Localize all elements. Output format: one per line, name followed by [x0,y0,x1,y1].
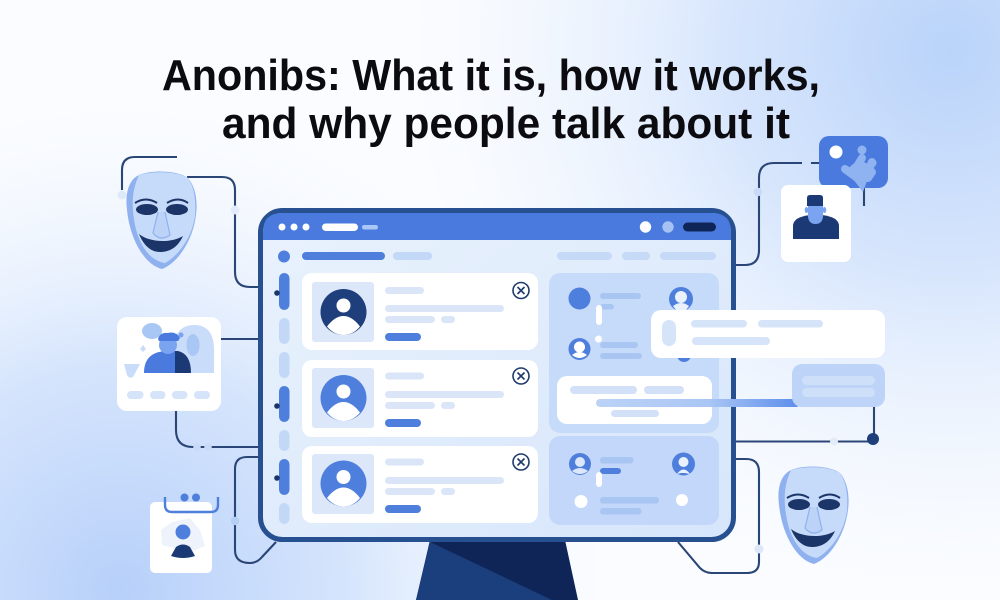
bottom-left calendar card [150,494,218,573]
profile card 1 [302,273,538,350]
monitor [260,210,734,540]
gradient progress bar [596,399,800,407]
right panel top [549,273,719,433]
bottom-right mask [778,467,849,564]
toolbar [278,250,716,262]
top-right blue image card [819,136,888,192]
browser header bar [263,213,731,240]
sidebar [274,273,290,524]
left image card [117,317,221,411]
floating notification card [651,310,885,358]
connector end node [867,433,879,445]
left mask [126,172,197,269]
title [162,51,820,148]
right panel bottom [549,436,719,525]
profile card 2 [302,360,538,437]
connector lines [122,157,874,573]
title: and why people talk about it [222,99,790,148]
title: Anonibs: What it is, how it works, [162,51,820,100]
connector nodes [118,188,838,554]
top-right profile card [781,185,851,262]
monitor stand [416,540,578,600]
profile card 3 [302,446,538,523]
small blue card [792,364,885,407]
floating white message card [557,376,712,424]
